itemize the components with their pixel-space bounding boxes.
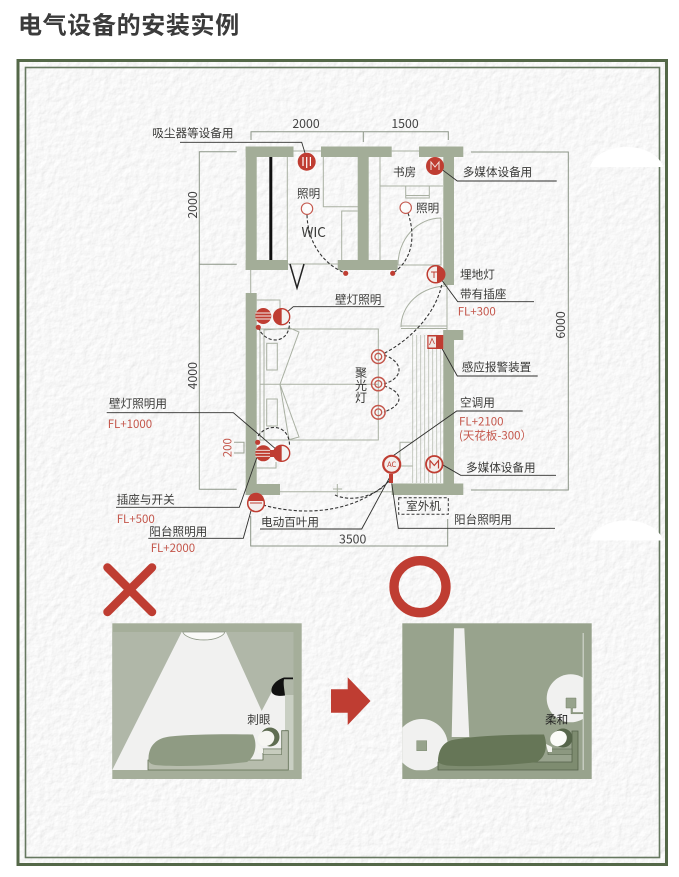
icon: air conditioner: AC <box>387 459 397 470</box>
interior thin lines <box>251 151 447 495</box>
closet rod <box>269 157 272 260</box>
dimension numbers: 6000 <box>551 311 569 339</box>
label: 刺眼 <box>247 712 271 728</box>
walls <box>246 146 463 495</box>
icon: wall lamp lower <box>255 445 290 461</box>
plan labels: 书房 <box>393 164 416 180</box>
icon: multimedia outlet top <box>426 157 444 175</box>
dimension numbers: 3500 <box>339 530 367 548</box>
dimension numbers <box>183 114 569 548</box>
panel: soft lighting <box>396 623 595 779</box>
bed plan <box>260 328 378 440</box>
icon: outlet vacuum <box>298 153 316 171</box>
plan labels: 多媒体设备用 <box>466 460 536 476</box>
wall lamp <box>271 678 293 696</box>
floor lamp glow <box>396 674 595 771</box>
icon: spotlights <box>372 350 385 419</box>
leader lines <box>107 142 557 538</box>
plan labels: FL+1000 <box>108 416 152 432</box>
icon: study light <box>400 202 411 213</box>
icon: floor outlet <box>427 266 446 283</box>
plan labels <box>108 125 536 556</box>
plan labels: FL+2000 <box>151 540 195 556</box>
icon: wrong cross <box>108 568 152 612</box>
lamp squares <box>417 741 427 751</box>
icon: balcony light outlet <box>248 493 264 512</box>
icon: multimedia outlet bottom <box>426 456 443 473</box>
icon: correct circle <box>394 561 446 613</box>
decorative white cap top <box>590 147 663 167</box>
plan labels: 阳台照明用 <box>149 523 207 539</box>
floor plan <box>246 146 463 495</box>
door symbol V <box>290 264 304 288</box>
icon: air conditioner <box>383 456 400 483</box>
ceiling lamp <box>183 632 225 640</box>
icon: alarm sensor <box>427 335 443 349</box>
plan labels: 插座与开关 <box>117 492 175 508</box>
bed <box>438 728 578 770</box>
plan labels: 埋地灯 <box>460 266 495 282</box>
icon: WIC light <box>301 203 313 214</box>
arrow <box>331 677 370 725</box>
dimension numbers: 1500 <box>391 114 419 132</box>
outdoor unit box <box>399 498 448 514</box>
plan labels: 多媒体设备用 <box>463 164 532 180</box>
plan labels: 吸尘器等设备用 <box>152 125 233 141</box>
plan labels: FL+2100 <box>459 414 504 430</box>
panel: harsh lighting <box>112 623 302 779</box>
plan labels: 灯 <box>355 389 367 406</box>
decorative white cap bottom <box>590 520 663 540</box>
plan labels: 聚 <box>355 364 367 381</box>
plan labels: WIC <box>302 221 326 241</box>
balcony slats <box>413 335 441 483</box>
plan labels: 带有插座 <box>460 286 507 302</box>
outdoor unit box: 室外机 <box>406 498 441 514</box>
icon: wiring dots <box>255 271 395 445</box>
icon: wall lamp upper <box>255 308 290 325</box>
plan labels: 阳台照明用 <box>454 512 512 528</box>
wall lamp square <box>566 698 583 714</box>
label: 柔和 <box>545 712 568 728</box>
wiring dashes <box>258 213 442 511</box>
plan labels: (天花板-300） <box>459 428 532 444</box>
plan labels: FL+500 <box>117 511 155 527</box>
light beam <box>452 628 469 737</box>
plan labels: FL+300 <box>458 304 496 320</box>
right wall highlight <box>582 633 584 770</box>
bed <box>148 728 288 770</box>
plan labels: 壁灯照明 <box>335 292 381 308</box>
dimension numbers: 2000 <box>183 191 201 219</box>
title: 电气设备的安装实例 <box>18 6 240 40</box>
dimension lines <box>199 132 568 546</box>
dimension numbers: 200 <box>220 438 236 457</box>
plan labels: 照明 <box>416 200 439 216</box>
plan labels: 空调用 <box>460 394 495 410</box>
dimension numbers: 2000 <box>292 114 320 132</box>
dimension numbers: 4000 <box>183 362 201 389</box>
plan labels: 壁灯照明用 <box>109 396 167 412</box>
light area <box>112 632 285 770</box>
plan labels: 照明 <box>297 186 320 202</box>
plan labels: 感应报警装置 <box>462 359 531 375</box>
plan labels: 光 <box>355 376 367 394</box>
plan labels: 电动百叶用 <box>261 514 319 530</box>
